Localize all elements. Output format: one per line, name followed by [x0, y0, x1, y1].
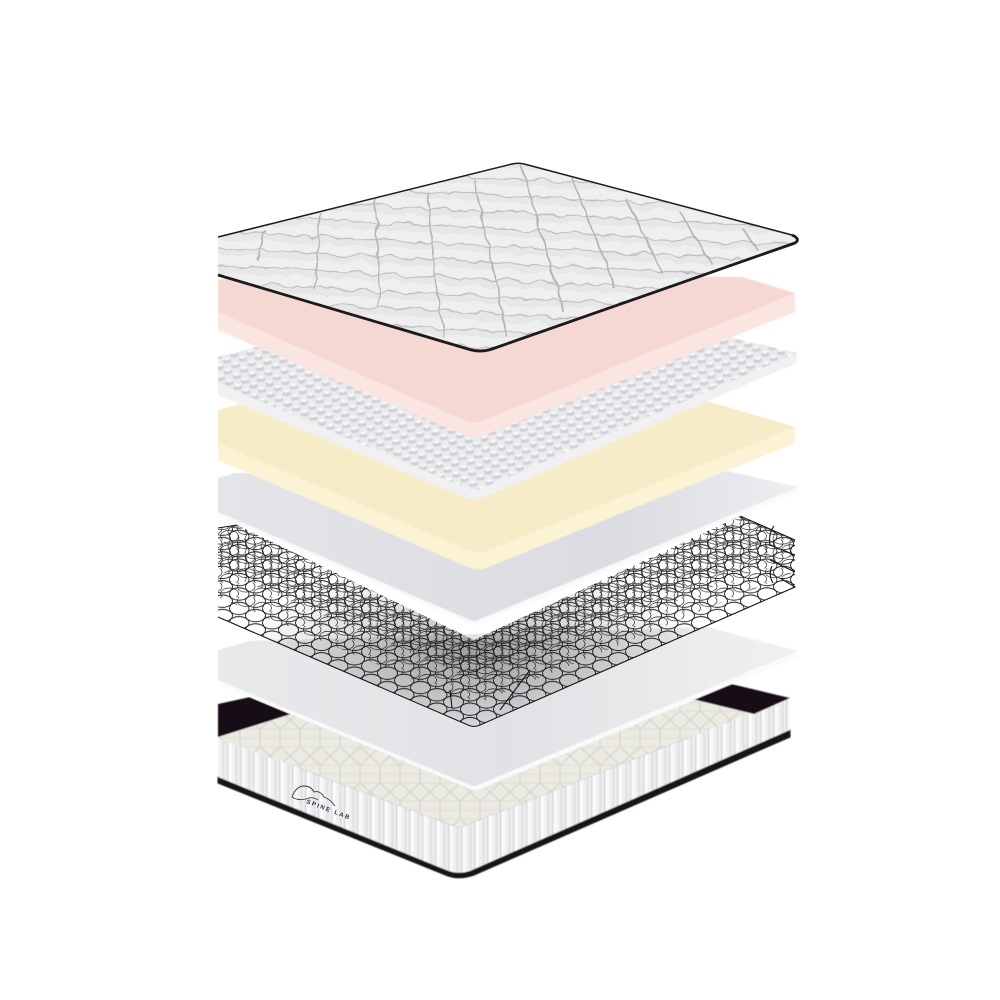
black corner patch left [218, 697, 291, 737]
pink top [218, 270, 795, 422]
quilting stitches [218, 164, 790, 350]
spring frame wires [218, 516, 795, 726]
layer: quilted top cover [218, 162, 799, 352]
layer: upper white felt sheet [218, 470, 798, 625]
pink side [218, 293, 795, 438]
foam side [218, 427, 795, 570]
layer: yellow foam [218, 400, 795, 570]
stitch columns [260, 167, 757, 337]
cover piping front edge [218, 235, 797, 351]
layer: egg-crate foam [218, 337, 797, 500]
cover fabric base [218, 163, 797, 351]
striped side panels [218, 698, 790, 873]
cover piping back edge [218, 163, 792, 237]
exploded mattress diagram [216, 162, 799, 880]
layer: bonnell spring unit [218, 516, 795, 727]
foam top [218, 400, 795, 552]
quilted cream top [218, 683, 790, 828]
layer: pink foam [218, 270, 795, 438]
sheet face [218, 627, 798, 786]
stitch rows [218, 176, 790, 350]
middle coil row [218, 516, 795, 705]
egg-crate side [218, 353, 797, 500]
brand logo [292, 786, 352, 822]
egg-crate top [218, 337, 797, 490]
black base edge [218, 729, 790, 878]
logo cloud outline [292, 786, 335, 806]
dense centre shading [218, 516, 795, 727]
sheet face [218, 470, 798, 621]
sheet edge [218, 486, 798, 625]
bottom coil row [218, 516, 795, 727]
sheet edge [218, 650, 798, 790]
logo wordmark: SPINE LAB [305, 799, 352, 822]
layer: bottom mattress base [218, 683, 790, 878]
top coil row [218, 525, 775, 672]
black corner patch right [688, 683, 790, 714]
upper coil row [218, 516, 795, 680]
layer: lower white felt sheet [218, 627, 798, 790]
